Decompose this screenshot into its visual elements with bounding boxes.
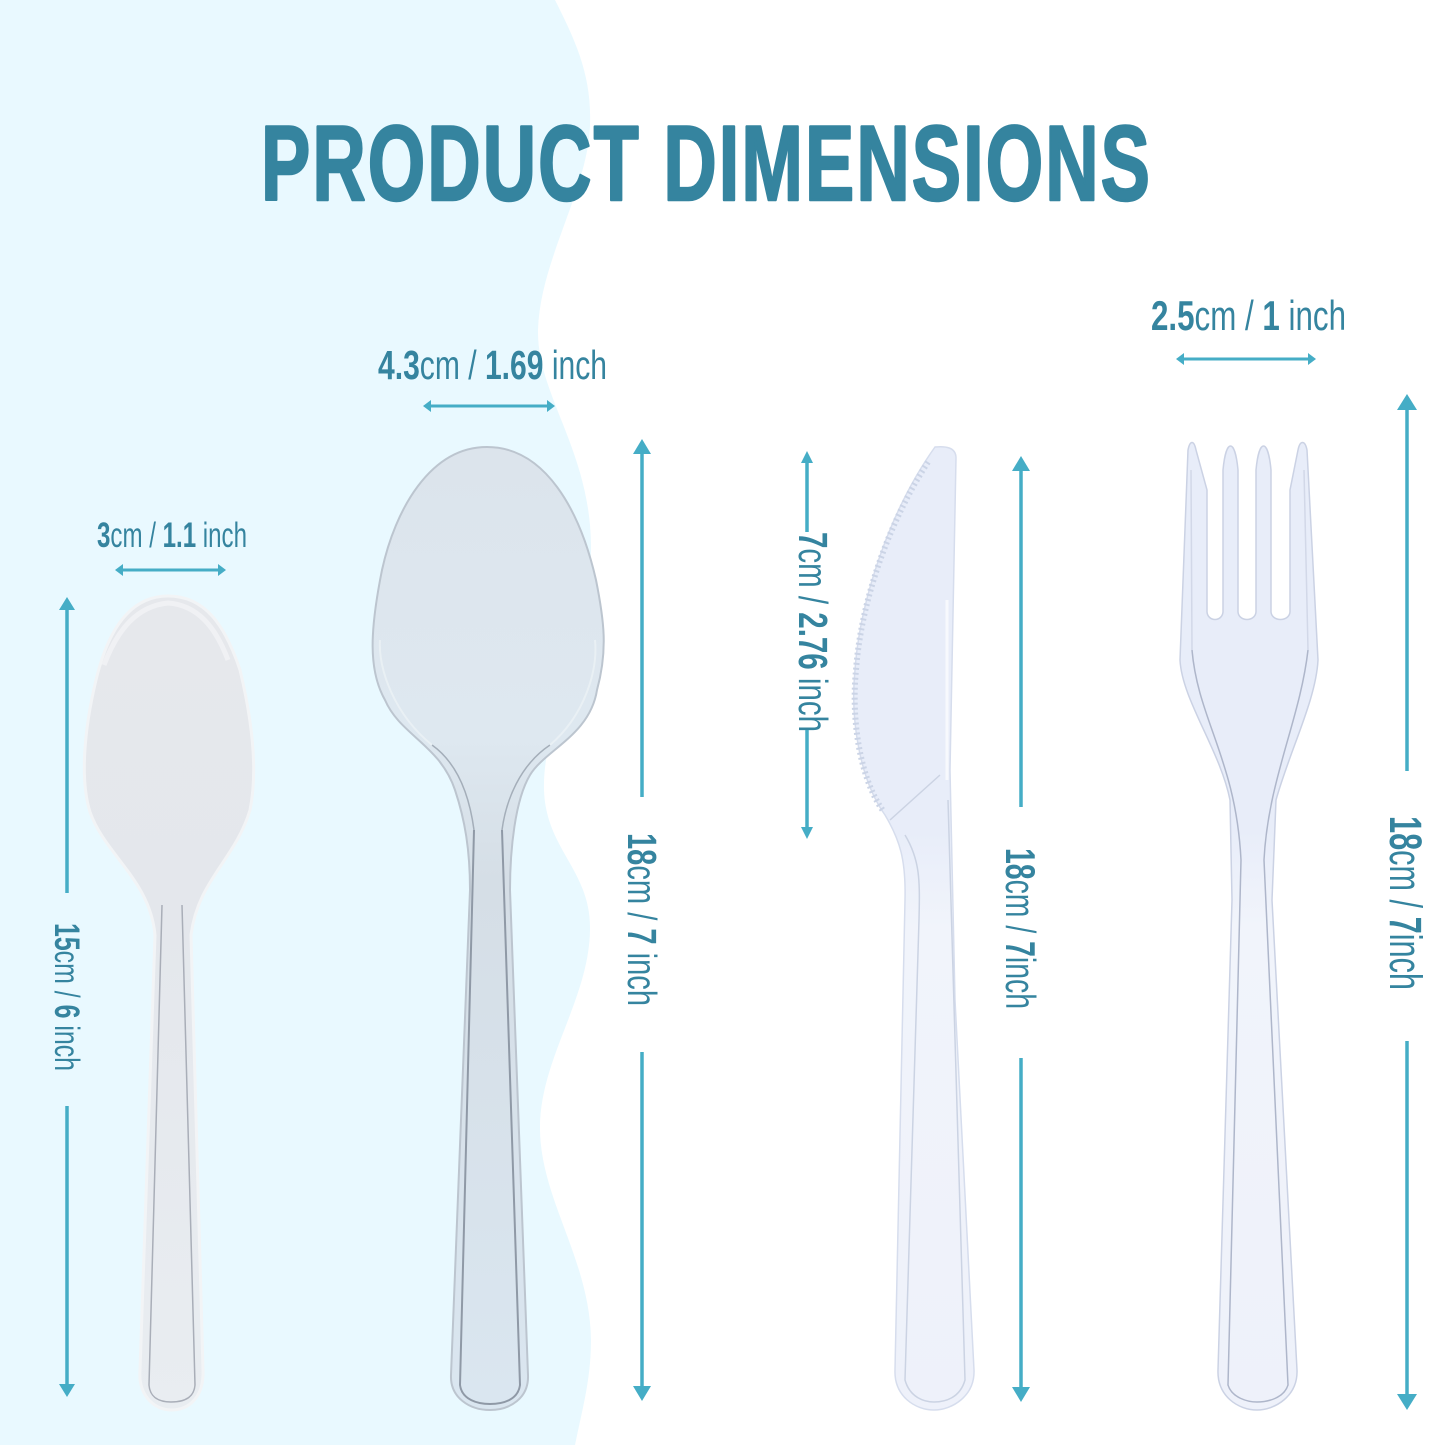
large spoon bbox=[373, 447, 604, 1410]
height label: small spoon: 15cm / 6 inch bbox=[47, 923, 86, 1071]
arrow: small spoon height bbox=[59, 597, 75, 1397]
arrow: large spoon height bbox=[633, 439, 651, 1401]
arrow: large spoon width bbox=[423, 400, 555, 412]
height label: fork: 18cm / 7inch bbox=[1380, 816, 1431, 990]
arrow: fork width bbox=[1176, 353, 1316, 365]
knife bbox=[854, 447, 974, 1410]
small spoon bbox=[84, 596, 254, 1410]
width label: small spoon: 3cm / 1.1 inch bbox=[97, 516, 247, 555]
arrow: fork height bbox=[1397, 394, 1417, 1410]
width label: fork: 2.5cm / 1 inch bbox=[1151, 292, 1346, 339]
arrow: knife height bbox=[1012, 456, 1030, 1402]
fork bbox=[1180, 442, 1318, 1410]
width label: large spoon: 4.3cm / 1.69 inch bbox=[378, 342, 607, 388]
height label: knife: 18cm / 7inch bbox=[997, 848, 1044, 1009]
blade length label: 7cm / 2.76 inch bbox=[790, 532, 836, 732]
arrow: blade length bbox=[801, 451, 813, 839]
background wave panel bbox=[0, 0, 591, 1445]
height label: large spoon: 18cm / 7 inch bbox=[619, 833, 665, 1006]
arrow: small spoon width bbox=[115, 564, 226, 576]
